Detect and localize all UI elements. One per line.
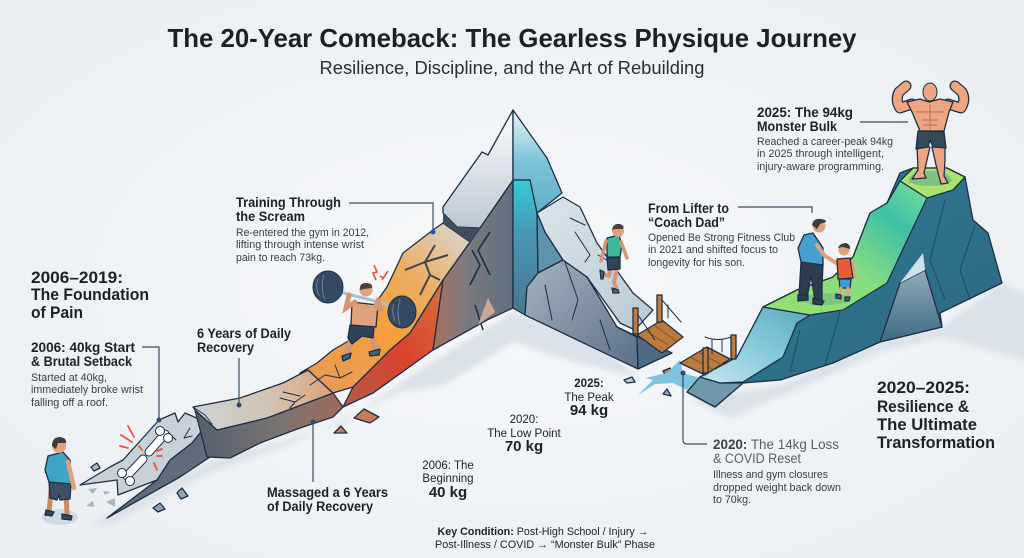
dark base [617,327,672,369]
callout: training through the scream [236,195,369,264]
snowy cap left [443,110,513,228]
key condition note: Key Condition: Post-High School / Injury → [438,526,648,538]
illustration: central mountain [300,110,672,407]
callout: 2020-2025 section heading: The Ultimate [877,415,977,434]
ground shadows [90,283,1024,525]
callout: 2020 covid reset [713,437,841,506]
lower rock [525,260,638,369]
callout: massaged: Massaged a 6 Years [267,485,388,500]
callout: coach dad: Opened Be Strong Fitness Club [648,232,795,244]
callout: coach dad [648,201,795,269]
green ramp surface [763,181,927,315]
stat: 2020 low point: The Low Point [487,428,562,440]
stat: 2006 beginning [422,460,474,501]
subtitle: Resilience, Discipline, and the Art of Rebuilding [320,58,704,78]
stat: 2020 low point [487,414,562,455]
figure: descending runner [600,224,627,293]
callout: massaged [267,485,388,514]
facets [790,200,975,372]
icon: broken bone [118,426,172,486]
callout: training through the scream: Training Through [236,195,341,210]
green summit [900,168,965,198]
callout: 2006 setback: immediately broke wrist [31,384,143,396]
rubble stones [86,368,673,512]
callout: training through the scream: pain to reach 73kg. [236,252,325,264]
callout: 2006-2019 section heading: of Pain [31,303,83,322]
title: The 20-Year Comeback: The Gearless Physique Journey [168,23,857,53]
leader: 2006 setback [142,347,162,422]
callout: coach dad: “Coach Dad” [648,215,725,230]
callout: 2020-2025 section heading: Transformation [877,433,995,452]
stat: 2025 peak: 2025: [574,378,604,390]
snowy cap right [513,110,562,213]
callout: 2006 setback: 2006: 40kg Start [31,340,136,355]
stat: 2020 low point: 2020: [510,414,538,426]
callout: 2020 covid reset: Illness and gym closures [713,469,829,481]
callout: 2006-2019 section heading: The Foundation [31,285,149,304]
callout: 2006 setback: Started at 40kg, [31,372,107,384]
leader: monster bulk [860,121,908,123]
orange ramp [300,223,470,393]
stat: 2025 peak: The Peak [564,392,614,404]
front tip [687,377,743,407]
illustration: right mountain [687,168,1002,407]
leader: coach dad [738,207,812,213]
stat: 2025 peak [564,378,614,419]
leader: massaged [310,420,316,482]
key condition note [435,526,655,551]
illustration: broken start slab [80,413,210,518]
callout: massaged: of Daily Recovery [267,499,373,514]
red cliff face [343,280,443,407]
callout: 6 years of daily recovery: 6 Years of Daily [197,326,291,341]
callout: training through the scream: lifting through intense wrist [236,239,364,251]
illustration: ice water gap [638,360,700,395]
callout: 2020 covid reset: & COVID Reset [713,451,801,466]
callout: 2025 monster bulk: Reached a career-peak 94kg [757,136,893,148]
callout: training through the scream: Re-entered the gym in 2012, [236,227,369,239]
callout: coach dad: From Lifter to [648,201,729,216]
callout: 2006 setback: & Brutal Setback [31,354,132,369]
callout: coach dad: longevity for his son. [648,257,745,269]
callout: 2006-2019 section heading: 2006–2019: [31,268,123,287]
callout: 2006-2019 section heading [31,268,149,322]
pale lower ramp face [700,307,810,383]
stat: 2006 beginning: 2006: The [422,460,474,472]
figure: lifter with barbell [313,265,416,361]
callout: coach dad: in 2021 and shifted focus to [648,244,778,256]
figure: dad and son [798,219,855,305]
lower arch rock [880,270,942,342]
stat: 2025 peak: 94 kg [570,402,608,419]
callout: 2025 monster bulk: in 2025 through intelligent, [757,148,884,160]
callout: 6 years of daily recovery: Recovery [197,340,254,355]
callout: 2020-2025 section heading [877,378,995,452]
illustration: right bridge [680,335,736,375]
figure: man looking at the slab [42,437,78,525]
callout: 2025 monster bulk: 2025: The 94kg [757,105,853,120]
icy descent surface [537,197,653,330]
brown cracked face [433,180,513,350]
key condition note: Post-Illness / COVID → “Monster Bulk” Phase [435,539,655,551]
stat: 2020 low point: 70 kg [505,438,543,455]
dark gap [443,213,480,242]
blue shaded gully [537,213,563,273]
callout: 2020 covid reset: dropped weight back down [713,482,841,494]
callout: training through the scream: the Scream [236,209,305,224]
callout: 2006 setback [31,340,143,409]
callout: 2020-2025 section heading: Resilience & [877,397,969,416]
callout: 2025 monster bulk: Monster Bulk [757,119,837,134]
callout: 2020-2025 section heading: 2020–2025: [877,378,970,397]
callout: 2025 monster bulk [757,105,893,173]
stat: 2006 beginning: 40 kg [429,484,467,501]
illustration: left bridge [633,295,683,353]
callout: 2025 monster bulk: injury-aware programming. [757,161,884,173]
callout: 2020 covid reset: 2020: The 14kg Loss [713,437,839,452]
callout: 6 years of daily recovery [197,326,291,355]
leader: 6 years [236,358,242,408]
illustration: recovery slab [193,370,343,458]
leader: covid reset [680,370,707,444]
leader: training [349,203,436,234]
icon: pain marks [120,426,162,470]
figure: muscular man flexing [897,83,964,186]
callout: 2020 covid reset: to 70kg. [713,494,751,506]
stat: 2006 beginning: Beginning [422,473,474,485]
teal inner face [513,180,538,315]
callout: 2006 setback: falling off a roof. [31,397,108,409]
